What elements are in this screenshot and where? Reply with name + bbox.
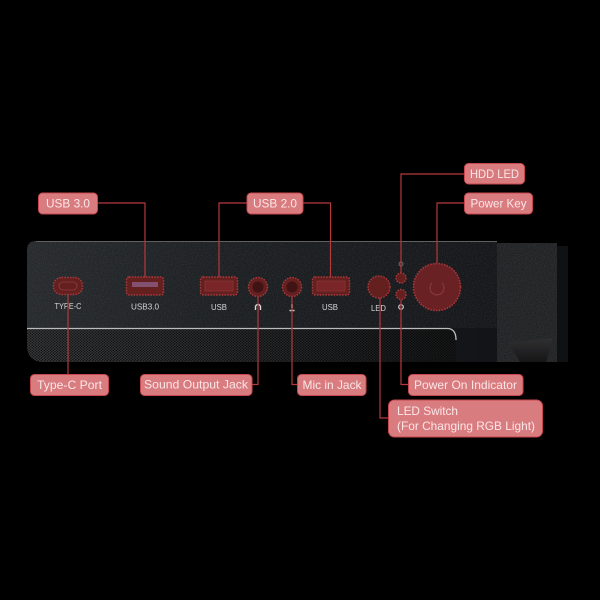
label: Type-C Port: Type-C Port — [37, 378, 103, 392]
label: LED Switch: (For Changing RGB Light) — [397, 419, 535, 433]
port caption: USB right: USB — [322, 303, 338, 312]
icon: power glyph — [399, 305, 403, 309]
label: Sound Output Jack: Sound Output Jack — [144, 378, 249, 392]
port: USB 3.0 — [126, 277, 164, 295]
button: LED switch — [368, 276, 390, 298]
icon: HDD glyph — [399, 262, 403, 266]
label: LED Switch: LED Switch — [397, 404, 458, 418]
label: USB 3.0: USB 3.0 — [46, 196, 90, 210]
port caption: TYPE-C: TYPE-C — [54, 302, 82, 311]
connector: HDD LED — [401, 174, 464, 273]
label: Type-C Port — [30, 374, 108, 396]
panel: PC case front I/O — [27, 241, 568, 362]
port: headphone jack — [248, 278, 268, 296]
case face — [27, 241, 497, 362]
speaker grill — [27, 328, 456, 362]
label: HDD LED: HDD LED — [470, 167, 519, 181]
port: USB left — [200, 277, 238, 295]
port caption: USB left: USB — [211, 303, 227, 312]
button: power key — [414, 264, 460, 310]
indicator: power on — [396, 290, 406, 300]
label: Power On Indicator: Power On Indicator — [414, 378, 517, 392]
connector: Mic — [292, 297, 297, 384]
label: LED Switch — [388, 400, 542, 437]
connector: Type-C — [67, 294, 69, 374]
icon: microphone — [290, 304, 294, 310]
icon: headphones — [256, 304, 260, 310]
label: USB 3.0 — [38, 193, 98, 214]
port caption: USB3.0: USB3.0 — [131, 302, 160, 312]
label: HDD LED — [464, 164, 524, 184]
port: USB right — [312, 277, 350, 295]
connector: USB 2.0 — [219, 203, 330, 277]
port caption: LED: LED — [371, 304, 386, 313]
connector: Sound Output — [252, 297, 258, 384]
connector: Power Key — [437, 203, 464, 263]
label: USB 2.0 — [247, 193, 303, 214]
label: Mic in Jack — [298, 374, 366, 396]
indicator: HDD LED — [396, 273, 406, 283]
right side block — [497, 243, 568, 362]
connector: USB 3.0 — [98, 203, 145, 277]
port: USB-C — [54, 278, 82, 294]
label: Sound Output Jack — [140, 374, 252, 396]
port: mic jack — [282, 278, 302, 296]
connector: LED Switch — [380, 298, 388, 418]
label: Power Key — [464, 193, 532, 214]
connector: Power On — [401, 300, 408, 384]
label: USB 2.0: USB 2.0 — [253, 196, 297, 210]
label: Mic in Jack: Mic in Jack — [302, 378, 362, 392]
label: Power On Indicator — [408, 374, 523, 396]
label: Power Key: Power Key — [470, 196, 526, 210]
